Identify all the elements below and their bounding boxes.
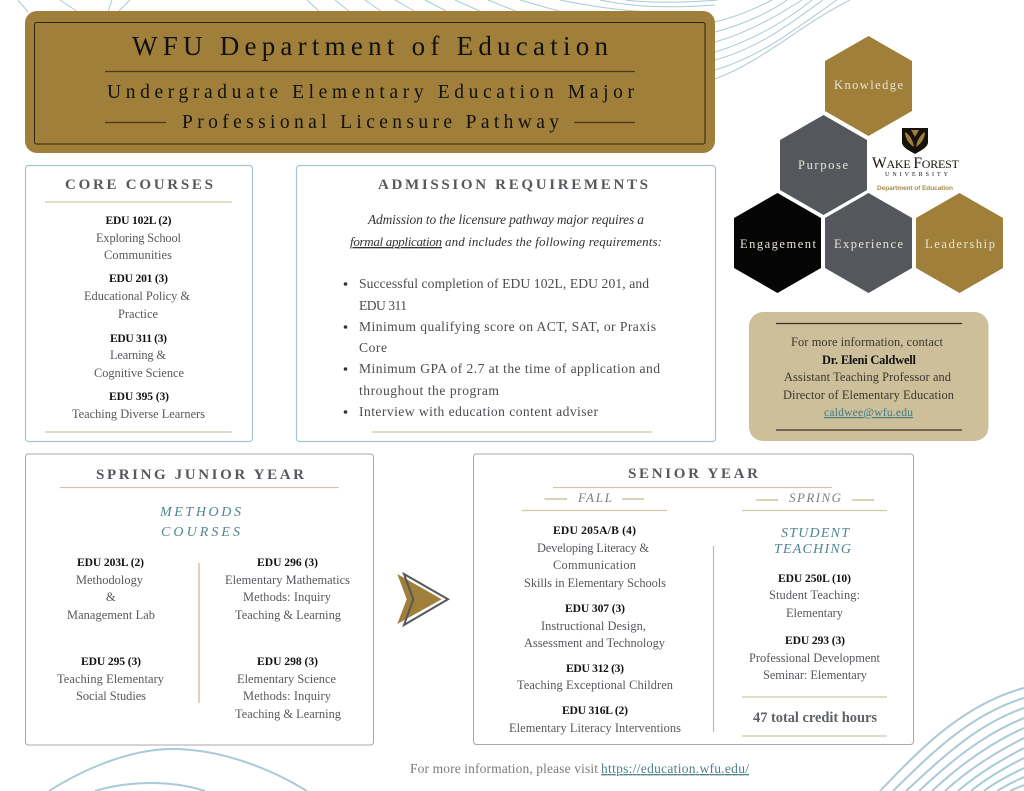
contact box: Dr. Eleni Caldwell <box>822 353 917 367</box>
subheading: fall: FALL <box>577 490 612 505</box>
requirements list: Minimum GPA of 2.7 at the time of application and <box>359 361 660 376</box>
hexagon: Engagement <box>734 193 821 293</box>
title banner <box>25 11 715 153</box>
course: EDU 296: Elementary Mathematics <box>225 573 350 587</box>
icon: shield <box>902 128 928 154</box>
subheading: student teaching: STUDENT <box>781 526 850 541</box>
course: EDU 250L: Student Teaching: <box>769 588 860 602</box>
course: EDU 102L: Communities <box>104 248 172 262</box>
logo: Wake Forest University: WAKE FOREST <box>872 155 960 172</box>
logo: Wake Forest University <box>872 128 960 192</box>
subheading: student teaching <box>774 526 851 557</box>
course: EDU 293: Seminar: Elementary <box>763 668 868 682</box>
pathway subtitle: Professional Licensure Pathway <box>182 112 559 133</box>
course: EDU 293: Professional Development <box>749 651 881 665</box>
hexagon: Engagement: Engagement <box>740 237 817 251</box>
hexagon: Purpose: Purpose <box>798 158 848 172</box>
course: EDU 298: Methods: Inquiry <box>243 689 332 703</box>
course: EDU 293 <box>749 634 881 682</box>
contact box: For more information, contact <box>791 335 944 349</box>
course: EDU 298 <box>235 655 341 721</box>
course: EDU 307: Instructional Design, <box>541 619 646 633</box>
requirements list: throughout the program <box>359 383 499 398</box>
panel: senior year <box>474 454 914 744</box>
course: EDU 250L <box>769 572 860 620</box>
contact box: Director of Elementary Education <box>783 388 954 402</box>
course: EDU 295 <box>57 655 165 703</box>
course: EDU 295: Teaching Elementary <box>57 672 165 686</box>
course: EDU 316L <box>509 704 681 735</box>
course: EDU 311: Cognitive Science <box>94 366 184 380</box>
course: EDU 316L: Elementary Literacy Interventions <box>509 721 681 735</box>
course: EDU 296 <box>225 556 350 622</box>
heading: core courses: CORE COURSES <box>65 177 213 193</box>
subheading: student teaching: TEACHING <box>774 542 851 557</box>
course: EDU 298: Teaching & Learning <box>235 707 341 721</box>
hexagon cluster <box>734 36 1003 293</box>
panel: admission requirements <box>296 166 716 442</box>
intro text <box>350 212 662 249</box>
heading: admission requirements: ADMISSION REQUIREMENTS <box>378 177 648 193</box>
course: EDU 307: EDU 307 (3) <box>565 602 625 615</box>
course: EDU 203L: Methodology <box>76 573 144 587</box>
logo: Wake Forest University: UNIVERSITY <box>885 172 949 178</box>
course: EDU 311: Learning & <box>110 348 166 362</box>
title: WFU Department of Education <box>132 31 608 61</box>
intro text: formal application <box>350 234 442 249</box>
course: EDU 205A/B: Developing Literacy & <box>537 541 649 555</box>
course: EDU 205A/B <box>524 524 666 590</box>
course: EDU 102L <box>96 214 182 262</box>
course: EDU 296: EDU 296 (3) <box>257 556 318 569</box>
course: EDU 201: Practice <box>118 307 158 321</box>
course: EDU 250L: EDU 250L (10) <box>778 572 851 585</box>
footer note <box>410 761 749 776</box>
total credit hours: 47 total credit hours <box>753 710 877 726</box>
course: EDU 296: Methods: Inquiry <box>243 590 332 604</box>
contact box <box>749 312 988 441</box>
footer note: https://education.wfu.edu/ <box>601 761 749 776</box>
course: EDU 203L: EDU 203L (2) <box>77 556 144 569</box>
course: EDU 307 <box>524 602 666 650</box>
panel: spring junior year <box>26 454 374 745</box>
hexagon: Experience <box>825 193 912 293</box>
heading: senior year: SENIOR YEAR <box>628 466 758 482</box>
background waves: bottom left <box>49 749 307 791</box>
course: EDU 311: EDU 311 (3) <box>110 332 167 345</box>
course: EDU 316L: EDU 316L (2) <box>562 704 628 717</box>
arrow <box>397 574 448 625</box>
subtitle: Undergraduate Elementary Education Major <box>107 82 634 103</box>
course: EDU 395 <box>72 390 205 421</box>
hexagon: Knowledge: Knowledge <box>834 78 903 92</box>
course: EDU 298: EDU 298 (3) <box>257 655 318 668</box>
course: EDU 295: EDU 295 (3) <box>81 655 141 668</box>
heading: spring junior year: SPRING JUNIOR YEAR <box>96 467 304 483</box>
logo: Wake Forest University: Department of Education <box>877 185 953 192</box>
course: EDU 201: Educational Policy & <box>84 289 190 303</box>
course: EDU 205A/B: EDU 205A/B (4) <box>553 524 636 537</box>
course: EDU 250L: Elementary <box>786 606 844 620</box>
requirements list: Core <box>359 340 387 355</box>
subheading: methods courses: COURSES <box>161 525 240 540</box>
course: EDU 312: EDU 312 (3) <box>566 662 624 675</box>
course: EDU 298: Elementary Science <box>237 672 336 686</box>
background waves: top <box>18 0 850 79</box>
course: EDU 296: Teaching & Learning <box>235 608 341 622</box>
course: EDU 102L: Exploring School <box>96 231 182 245</box>
hexagon: Leadership <box>916 193 1003 293</box>
background waves: bottom right <box>880 688 1024 791</box>
requirements list: Interview with education content adviser <box>359 404 598 419</box>
requirements list <box>344 276 660 419</box>
contact box: caldwee@wfu.edu <box>824 407 913 419</box>
panel: core courses <box>26 166 252 442</box>
course: EDU 203L <box>67 556 155 622</box>
subheading: methods courses: METHODS <box>159 505 241 520</box>
subheading: spring: SPRING <box>789 490 842 505</box>
course: EDU 312: Teaching Exceptional Children <box>517 678 673 692</box>
course: EDU 203L: Management Lab <box>67 608 155 622</box>
course: EDU 205A/B: Skills in Elementary Schools <box>524 576 666 590</box>
intro text: Admission to the licensure pathway major requires a <box>367 212 644 227</box>
contact box: Assistant Teaching Professor and <box>784 370 952 384</box>
course: EDU 395: Teaching Diverse Learners <box>72 407 205 421</box>
hexagon: Knowledge <box>825 36 912 136</box>
requirements list: Minimum qualifying score on ACT, SAT, or Praxis <box>359 319 656 334</box>
course: EDU 293: EDU 293 (3) <box>785 634 845 647</box>
course: EDU 205A/B: Communication <box>553 558 636 572</box>
course: EDU 312 <box>517 662 673 692</box>
course: EDU 395: EDU 395 (3) <box>109 390 169 403</box>
course: EDU 311 <box>94 332 184 380</box>
course: EDU 201: EDU 201 (3) <box>109 272 168 285</box>
hexagon: Leadership: Leadership <box>925 237 995 251</box>
requirements list: EDU 311 <box>359 298 407 313</box>
course: EDU 102L: EDU 102L (2) <box>106 214 172 227</box>
course: EDU 307: Assessment and Technology <box>524 636 666 650</box>
course: EDU 203L: & <box>106 590 116 604</box>
hexagon: Experience: Experience <box>834 237 903 251</box>
subheading: methods courses <box>159 505 241 540</box>
hexagon: Purpose <box>780 115 867 215</box>
course: EDU 201 <box>84 272 190 321</box>
requirements list: Successful completion of EDU 102L, EDU 201, and <box>359 276 649 291</box>
footer note: For more information, please visit <box>410 761 598 776</box>
intro text: and includes the following requirements: <box>445 234 662 249</box>
course: EDU 295: Social Studies <box>76 689 146 703</box>
